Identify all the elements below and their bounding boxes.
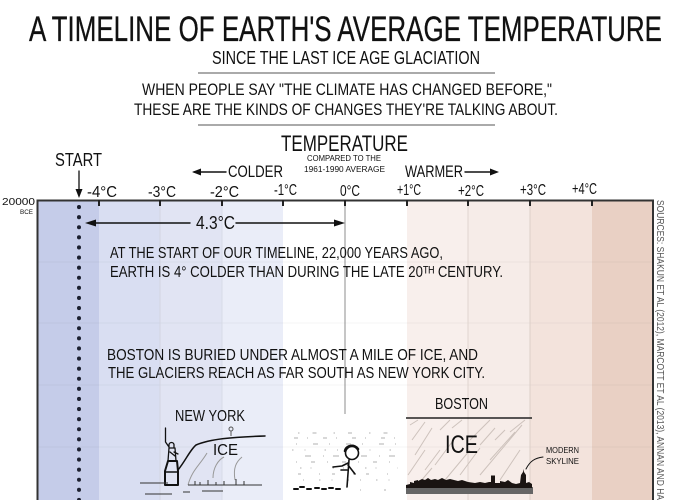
colder label with arrow <box>192 163 283 181</box>
intro text: THESE ARE THE KINDS OF CHANGES THEY'RE TALKING ABOUT. <box>134 101 558 119</box>
axis title <box>281 131 408 174</box>
panel: Boston <box>406 396 579 494</box>
text block: start of timeline: EARTH IS 4° COLDER THAN DURING THE LATE 20ᵀᴴ CENTURY. <box>110 264 503 281</box>
subtitle: SINCE THE LAST ICE AGE GLACIATION <box>212 48 480 68</box>
axis title: TEMPERATURE <box>281 131 408 156</box>
year label: BCE <box>20 209 34 216</box>
panel: Boston: BOSTON <box>435 396 488 413</box>
text block: Boston and glaciers: BOSTON IS BURIED UNDER ALMOST A MILE OF ICE, AND <box>107 347 478 364</box>
temperature tick labels: -1°C <box>274 182 297 199</box>
temperature tick labels: +3°C <box>520 182 546 199</box>
warmer label with arrow: WARMER <box>405 163 463 181</box>
span arrow 4.3 degrees: 4.3°C <box>196 213 235 233</box>
span arrow 4.3 degrees <box>85 213 345 233</box>
panel: snowy scene with figure <box>292 433 398 490</box>
colder label with arrow: COLDER <box>228 163 283 181</box>
start label with arrow <box>55 150 102 198</box>
temperature tick labels: -3°C <box>148 184 176 201</box>
text block: start of timeline: AT THE START OF OUR TIMELINE, 22,000 YEARS AGO, <box>110 245 443 262</box>
dotted temperature line <box>77 207 81 500</box>
axis title: COMPARED TO THE <box>307 154 381 163</box>
axis title: 1961-1990 AVERAGE <box>304 165 385 174</box>
temperature tick labels: +4°C <box>572 181 597 198</box>
temperature tick labels: +1°C <box>397 182 421 199</box>
year label <box>2 196 35 216</box>
start label with arrow: START <box>55 150 102 170</box>
intro text: WHEN PEOPLE SAY "THE CLIMATE HAS CHANGED BEFORE," <box>142 81 552 99</box>
text block: Boston and glaciers <box>107 347 485 382</box>
icon: modern skyline <box>406 469 533 494</box>
panel: New York: NEW YORK <box>175 408 246 425</box>
panel: New York <box>140 408 265 494</box>
intro text <box>134 81 558 119</box>
callout: modern skyline <box>526 445 579 469</box>
text block: start of timeline <box>110 245 503 281</box>
callout: modern skyline: MODERN <box>546 445 579 455</box>
year label: 20000 <box>2 196 35 208</box>
callout: modern skyline: SKYLINE <box>546 456 579 466</box>
panel: New York: ICE <box>213 442 238 459</box>
text block: Boston and glaciers: THE GLACIERS REACH AS FAR SOUTH AS NEW YORK CITY. <box>108 365 485 382</box>
panel: Boston: ICE <box>445 431 478 459</box>
temperature tick labels: 0°C <box>340 183 360 200</box>
chart frame and ticks <box>38 200 653 500</box>
chart background bands <box>37 200 653 500</box>
icon: statue of liberty <box>165 428 178 485</box>
temperature tick labels: -2°C <box>210 184 239 201</box>
temperature tick labels <box>87 181 597 201</box>
temperature tick labels: -4°C <box>87 184 117 201</box>
temperature tick labels: +2°C <box>458 183 484 200</box>
